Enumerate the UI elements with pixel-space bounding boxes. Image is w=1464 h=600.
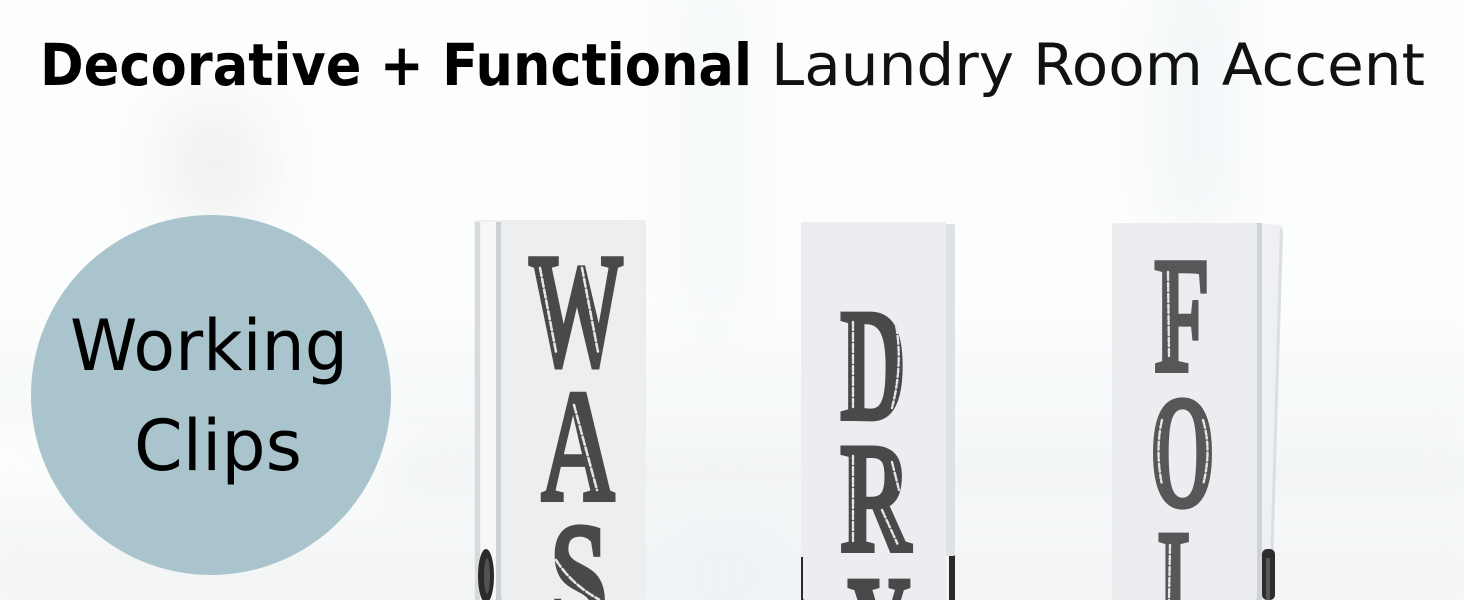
letter distress marks — [540, 268, 600, 600]
badge: working clips — [31, 215, 391, 575]
clip: DRY: R — [840, 411, 912, 586]
title — [40, 31, 1425, 99]
clip: DRY — [801, 222, 955, 600]
clip spring — [478, 549, 494, 600]
clip: DRY: D — [840, 276, 906, 454]
clip: FOLD — [1112, 223, 1283, 600]
badge: working clips: Clips — [134, 405, 302, 487]
clip: WASH: W — [528, 221, 624, 401]
title: Laundry Room Accent — [771, 31, 1425, 99]
clip: WASH: A — [541, 357, 615, 535]
clip: FOLD: O — [1150, 363, 1215, 541]
letter distress marks — [853, 322, 899, 545]
letter distress marks — [1158, 272, 1208, 600]
badge: working clips: Working — [70, 305, 348, 387]
title: Decorative + Functional — [40, 31, 752, 99]
clip spring — [1262, 549, 1275, 600]
clip: WASH — [474, 220, 646, 600]
clip: FOLD: F — [1154, 223, 1210, 407]
